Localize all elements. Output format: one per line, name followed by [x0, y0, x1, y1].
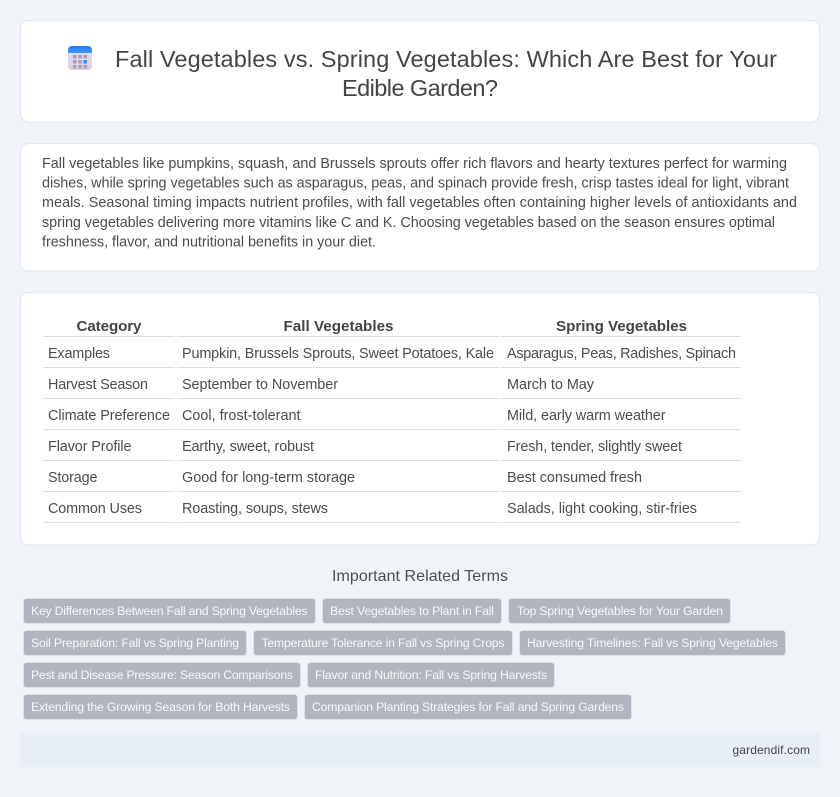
table row: storage: Best consumed fresh	[507, 470, 642, 486]
table row: flavor profile	[43, 439, 741, 461]
table row: common uses: Salads, light cooking, stir-fries	[507, 501, 697, 517]
table row: climate preference	[43, 408, 741, 430]
panel: summary text	[20, 144, 820, 271]
footer: gardendif.com	[732, 743, 810, 757]
table row: climate preference: Cool, frost-tolerant	[182, 408, 300, 424]
heading: important related terms: Important Related Terms	[332, 568, 508, 585]
title	[115, 46, 777, 101]
table row: common uses: Roasting, soups, stews	[182, 501, 328, 517]
table row: examples	[43, 346, 741, 368]
table header row	[43, 318, 741, 337]
tag	[508, 598, 730, 624]
summary paragraph: freshness, flavor, and nutritional benefits in your diet.	[42, 234, 376, 250]
summary paragraph: spring vegetables delivering more vitamins like C and K. Choosing vegetables based on the season ensures optimal	[42, 215, 775, 231]
table row: flavor profile: Earthy, sweet, robust	[182, 439, 314, 455]
table row: harvest season: September to November	[182, 377, 338, 393]
panel: title card	[20, 20, 820, 122]
tag: Pest and Disease Pressure: Season Comparisons	[31, 668, 293, 682]
tag: Top Spring Vegetables for Your Garden	[517, 604, 723, 618]
tag	[24, 662, 300, 688]
table row: climate preference: Climate Preference	[48, 408, 170, 424]
footer	[20, 733, 820, 767]
tag	[308, 662, 554, 688]
summary paragraph: meals. Seasonal timing impacts nutrient profiles, with fall vegetables often containing higher levels of antioxidants and	[42, 195, 797, 211]
table header row: Spring Vegetables	[556, 318, 687, 335]
summary paragraph: dishes, while spring vegetables such as asparagus, peas, and spinach provide fresh, crisp tastes ideal for light, vibrant	[42, 176, 789, 192]
table header row: Category	[76, 318, 142, 335]
table row: storage: Good for long-term storage	[182, 470, 355, 486]
table row: flavor profile: Fresh, tender, slightly sweet	[507, 439, 682, 455]
title: Fall Vegetables vs. Spring Vegetables: Which Are Best for Your	[115, 46, 777, 72]
table row: flavor profile: Flavor Profile	[48, 439, 132, 455]
table row: storage	[43, 470, 741, 492]
panel: comparison table	[20, 292, 820, 545]
tag: Best Vegetables to Plant in Fall	[330, 604, 494, 618]
tag: Companion Planting Strategies for Fall and Spring Gardens	[312, 700, 624, 714]
panel: related term tags	[24, 598, 786, 720]
tag: Harvesting Timelines: Fall vs Spring Vegetables	[527, 636, 778, 650]
table row: examples: Asparagus, Peas, Radishes, Spinach	[507, 346, 736, 362]
tag	[24, 694, 298, 720]
tag: Extending the Growing Season for Both Harvests	[31, 700, 290, 714]
table row: harvest season: March to May	[507, 377, 595, 393]
tag	[322, 598, 502, 624]
tag	[520, 630, 786, 656]
table row: examples: Examples	[48, 346, 110, 362]
tag	[24, 598, 316, 624]
tag: Key Differences Between Fall and Spring Vegetables	[31, 604, 308, 618]
summary paragraph: Fall vegetables like pumpkins, squash, and Brussels sprouts offer rich flavors and hearty textures perfect for warming	[42, 156, 787, 172]
tag: Soil Preparation: Fall vs Spring Planting	[31, 636, 239, 650]
table row: common uses	[43, 501, 741, 523]
icon: calendar	[68, 46, 92, 70]
tag: Flavor and Nutrition: Fall vs Spring Harvests	[315, 668, 547, 682]
tag: Temperature Tolerance in Fall vs Spring Crops	[262, 636, 504, 650]
table row: storage: Storage	[48, 470, 98, 486]
tag	[304, 694, 632, 720]
tag	[24, 630, 246, 656]
table row: harvest season: Harvest Season	[48, 377, 148, 393]
summary paragraph	[42, 156, 797, 250]
table row: climate preference: Mild, early warm weather	[507, 408, 666, 424]
table header row: Fall Vegetables	[284, 318, 394, 335]
table row: harvest season	[43, 377, 741, 399]
title: Edible Garden?	[342, 75, 498, 101]
table row: examples: Pumpkin, Brussels Sprouts, Sweet Potatoes, Kale	[182, 346, 494, 362]
tag	[254, 630, 512, 656]
table row: common uses: Common Uses	[48, 501, 142, 517]
